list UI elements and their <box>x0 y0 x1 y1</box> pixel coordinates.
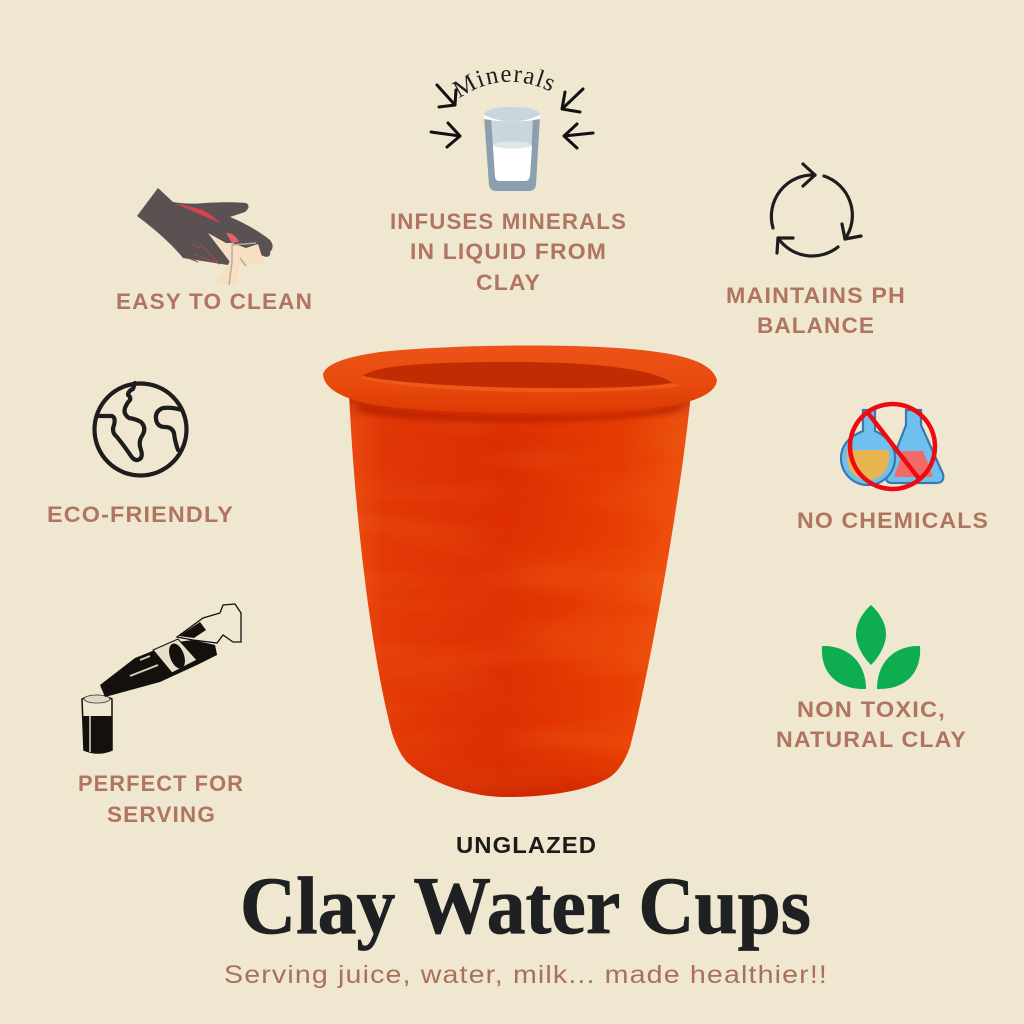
text: perfect for serving <box>78 771 244 827</box>
subtitle: unglazed: UNGLAZED <box>456 832 597 858</box>
icon: green leaves <box>822 605 920 689</box>
text: perfect for serving: PERFECT FOR <box>78 771 244 796</box>
icon: no chemicals flasks <box>841 404 943 489</box>
text: infuses minerals: INFUSES MINERALS <box>390 209 627 234</box>
glass <box>484 116 540 191</box>
icon label: curved word Minerals: Minerals <box>452 69 554 98</box>
icon: glass of milk with minerals <box>430 69 594 191</box>
title: Clay Water Cups <box>240 860 811 951</box>
icon: recycle circle arrows <box>771 164 861 256</box>
text: eco-friendly: ECO-FRIENDLY <box>47 502 234 527</box>
icon: hand with cloth <box>137 188 273 285</box>
clay cup photo <box>323 345 717 797</box>
text: infuses minerals: IN LIQUID FROM <box>410 239 607 264</box>
text: perfect for serving: SERVING <box>107 802 216 827</box>
icon: bottle pouring into glass <box>82 604 241 753</box>
text: maintains ph balance: BALANCE <box>757 313 875 338</box>
arrows pointing to the glass <box>431 85 593 148</box>
tagline: Serving juice, water, milk... made healthier!! <box>224 961 828 989</box>
text: non toxic natural clay: NON TOXIC, <box>797 697 946 722</box>
text: easy to clean: EASY TO CLEAN <box>116 289 313 314</box>
text: non toxic natural clay <box>776 697 967 752</box>
text: no chemicals: NO CHEMICALS <box>797 508 989 533</box>
prohibition sign <box>850 404 935 489</box>
text: infuses minerals: CLAY <box>476 270 541 295</box>
text: infuses minerals <box>390 209 627 295</box>
text: non toxic natural clay: NATURAL CLAY <box>776 727 967 752</box>
text: maintains ph balance: MAINTAINS PH <box>726 283 906 308</box>
icon: earth globe <box>94 383 186 476</box>
text: maintains ph balance <box>726 283 906 338</box>
